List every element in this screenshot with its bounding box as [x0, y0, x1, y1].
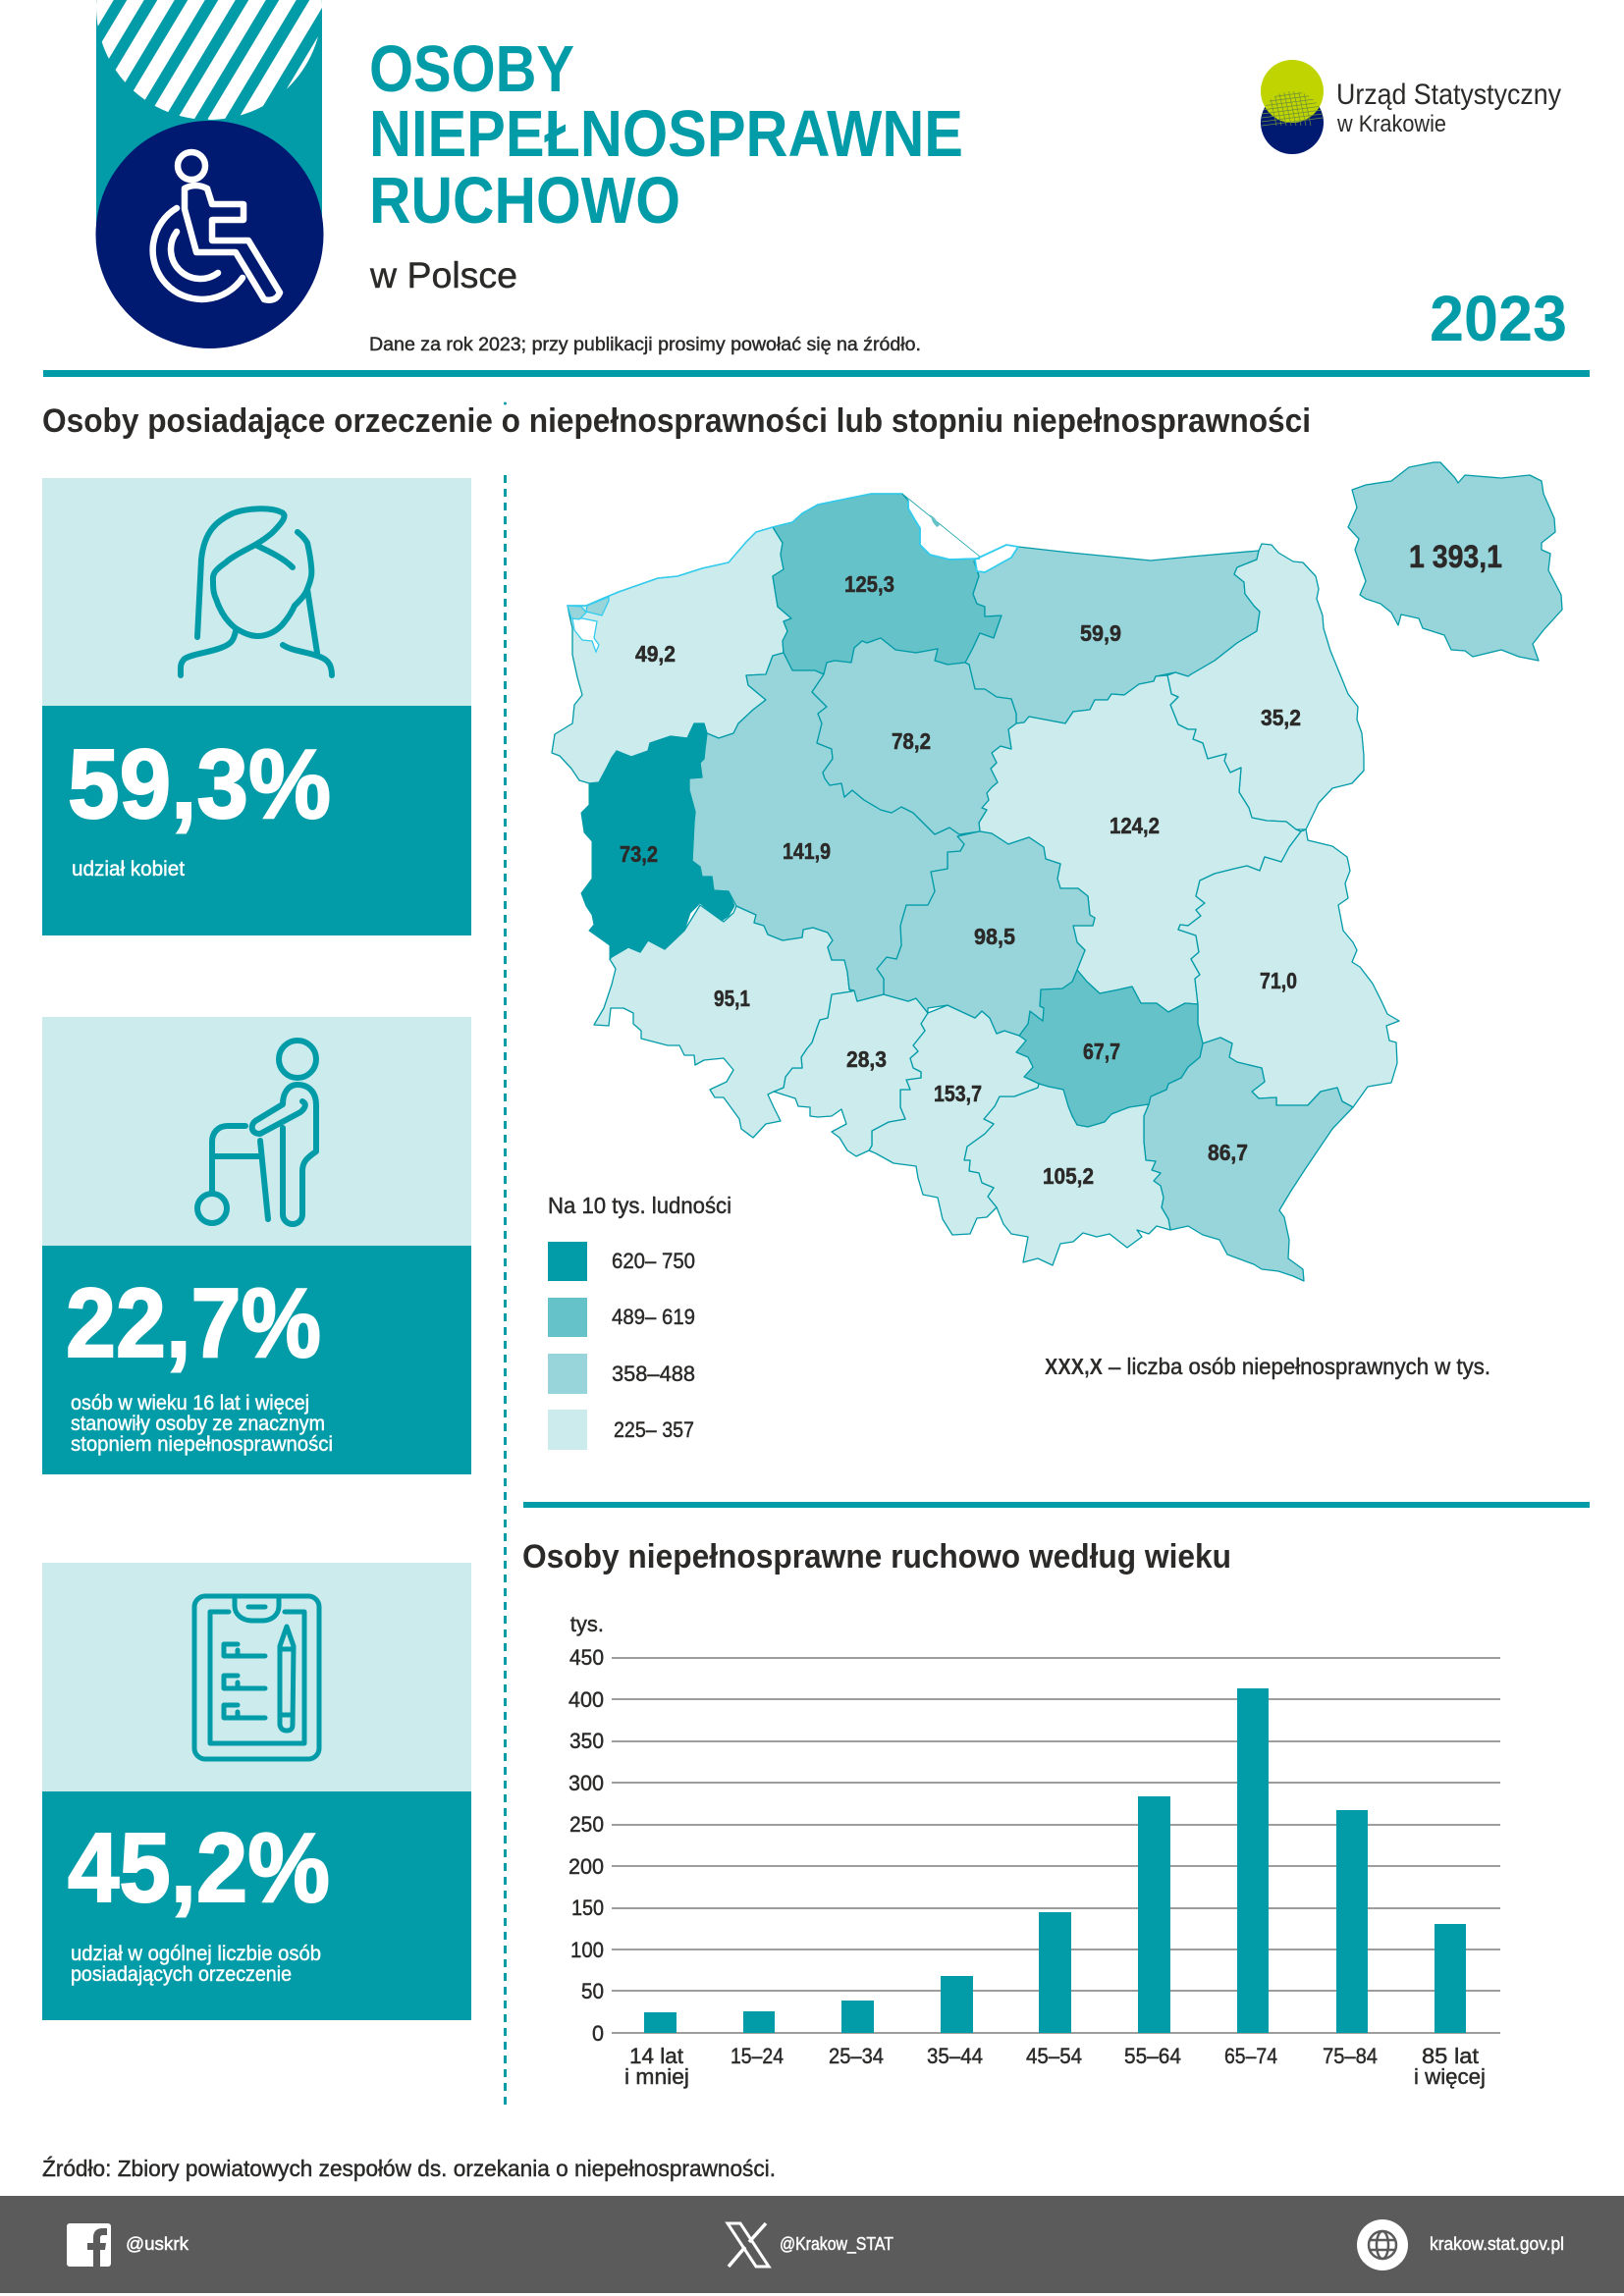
value: 45,2%: 45,2%: [68, 1813, 330, 1923]
x axis labels: i mniej: [624, 2064, 689, 2089]
x axis labels: 55–64: [1124, 2044, 1181, 2068]
y axis labels: tys.: [570, 1612, 604, 1636]
map legend: [548, 1193, 731, 1450]
inset map: Poland total: 1 393,1: [1409, 539, 1502, 574]
icon: clipboard with pencil: [194, 1596, 319, 1759]
region: świętokrzyskie: [1016, 970, 1203, 1127]
footer bar: [0, 2196, 1624, 2293]
region values: 28,3: [846, 1046, 887, 1072]
region values: 67,7: [1083, 1039, 1120, 1064]
region: małopolskie: [964, 1084, 1170, 1265]
x axis labels: 85 lat: [1422, 2044, 1479, 2068]
logo: Urząd Statystyczny w Krakowie: Urząd Statystyczny: [1336, 79, 1561, 111]
map legend: 489– 619: [612, 1305, 695, 1329]
header emblem: striped medallion with wheelchair: [96, 0, 324, 348]
bar chart: persons by age: [568, 1612, 1500, 2089]
vistula lagoon and spit: [902, 494, 1018, 572]
map note: – liczba osób niepełnosprawnych w tys.: [1109, 1354, 1490, 1379]
y axis labels: 100: [570, 1938, 604, 1962]
region values: 95,1: [714, 986, 750, 1011]
y axis labels: 300: [568, 1771, 604, 1795]
region values: 35,2: [1261, 705, 1301, 730]
region values: 124,2: [1110, 813, 1160, 838]
subtitle: w Polsce: [369, 255, 517, 295]
panel: women share: [42, 478, 471, 935]
x axis labels: 65–74: [1224, 2044, 1277, 2068]
value: 59,3%: 59,3%: [68, 729, 331, 839]
coast details: [568, 597, 609, 652]
region values: 98,5: [974, 924, 1015, 949]
map legend: 620– 750: [612, 1249, 695, 1273]
choropleth map of Poland: [552, 494, 1399, 1281]
inset map: Poland total: [1348, 462, 1562, 661]
icon: wheelchair user: [153, 152, 280, 300]
section heading: by age: Osoby niepełnosprawne ruchowo według wieku: [522, 1538, 1231, 1575]
title: NIEPEŁNOSPRAWNE: [369, 97, 963, 171]
map note: XXX,X: [1045, 1354, 1104, 1379]
coastline: [568, 494, 902, 606]
region: łódzkie: [877, 831, 1095, 1036]
region: śląskie: [869, 998, 1039, 1235]
x axis labels: i więcej: [1414, 2064, 1486, 2089]
panel: share of all certified: [42, 1563, 471, 2020]
map legend: 225– 357: [614, 1417, 694, 1442]
caption: [71, 1392, 333, 1456]
region values: 86,7: [1208, 1140, 1248, 1165]
caption: posiadających orzeczenie: [71, 1963, 292, 1986]
x axis labels: 35–44: [927, 2044, 983, 2068]
section heading: certified persons: Osoby posiadające orzeczenie o niepełnosprawności lub stopniu niepełnosprawności: [42, 402, 1311, 440]
caption: [71, 1943, 321, 1986]
year: 2023: [1430, 282, 1567, 354]
region values: 105,2: [1043, 1163, 1094, 1189]
y axis labels: [568, 1612, 604, 2046]
value: 22,7%: 22,7%: [66, 1268, 321, 1378]
region: podkarpackie: [1144, 1038, 1353, 1281]
caption: udział kobiet: [72, 858, 185, 881]
caption: udział w ogólnej liczbie osób: [71, 1943, 321, 1965]
region values: 59,9: [1080, 620, 1121, 646]
note on data: Dane za rok 2023; przy publikacji prosimy powołać się na źródło.: [369, 335, 921, 355]
icon: woman: [181, 508, 332, 675]
region: warmińsko-mazurskie: [965, 545, 1260, 723]
icon: globe: [1357, 2219, 1408, 2270]
x axis labels: 15–24: [731, 2044, 784, 2068]
title: OSOBY: [369, 32, 574, 106]
bars: [644, 1688, 1466, 2033]
icon: facebook: [67, 2223, 111, 2267]
region: wielkopolskie: [689, 653, 979, 1001]
region: opolskie: [774, 990, 928, 1156]
website: krakow.stat.gov.pl: [1430, 2234, 1564, 2254]
X handle: @Krakow_STAT: [780, 2234, 893, 2255]
x axis labels: 25–34: [829, 2044, 884, 2068]
logo: Urząd Statystyczny w Krakowie: w Krakowie: [1336, 111, 1446, 137]
y axis labels: 0: [592, 2021, 604, 2046]
map legend: 358–488: [612, 1362, 695, 1386]
caption: stopniem niepełnosprawności: [71, 1433, 333, 1456]
x axis labels: 75–84: [1323, 2044, 1378, 2068]
icon: X: [728, 2223, 769, 2267]
y axis labels: 50: [581, 1979, 604, 2003]
region values: 153,7: [934, 1081, 982, 1106]
region values: 78,2: [892, 728, 931, 754]
panel: significant disability: [42, 1017, 471, 1474]
map legend: Na 10 tys. ludności: [548, 1193, 731, 1218]
y axis labels: 450: [569, 1645, 604, 1670]
facebook handle: @uskrk: [126, 2234, 189, 2254]
region: dolnośląskie: [594, 905, 851, 1138]
source note: Źródło: Zbiory powiatowych zespołów ds. orzekania o niepełnosprawności.: [42, 2156, 776, 2181]
y axis labels: 150: [571, 1896, 604, 1920]
title: [369, 32, 963, 238]
region: kujawsko-pomorskie: [812, 638, 1016, 834]
region: lubelskie: [1178, 829, 1399, 1107]
region values: [620, 571, 1301, 1189]
region: podlaskie: [1167, 544, 1364, 829]
region values: 49,2: [635, 641, 676, 667]
x axis labels: 45–54: [1026, 2044, 1082, 2068]
logo: Urząd Statystyczny w Krakowie: [1261, 60, 1561, 154]
region values: 125,3: [844, 571, 894, 597]
region values: 141,9: [783, 838, 831, 864]
caption: osób w wieku 16 lat i więcej: [71, 1392, 309, 1415]
x axis labels: 14 lat: [629, 2044, 683, 2068]
y axis labels: 350: [569, 1729, 604, 1753]
x axis labels: [624, 2044, 1486, 2089]
y axis labels: 250: [569, 1812, 604, 1837]
title: RUCHOWO: [369, 164, 680, 238]
caption: stanowiły osoby ze znacznym: [71, 1413, 325, 1435]
region: mazowieckie: [979, 675, 1301, 1012]
y axis labels: 400: [568, 1687, 604, 1712]
y axis labels: 200: [568, 1854, 604, 1879]
icon: person with walker: [197, 1041, 316, 1224]
region: pomorskie: [773, 494, 1001, 674]
region: lubuskie: [581, 723, 734, 959]
region values: 71,0: [1260, 968, 1297, 993]
region: zachodniopomorskie: [552, 527, 791, 783]
region values: 73,2: [620, 841, 658, 867]
